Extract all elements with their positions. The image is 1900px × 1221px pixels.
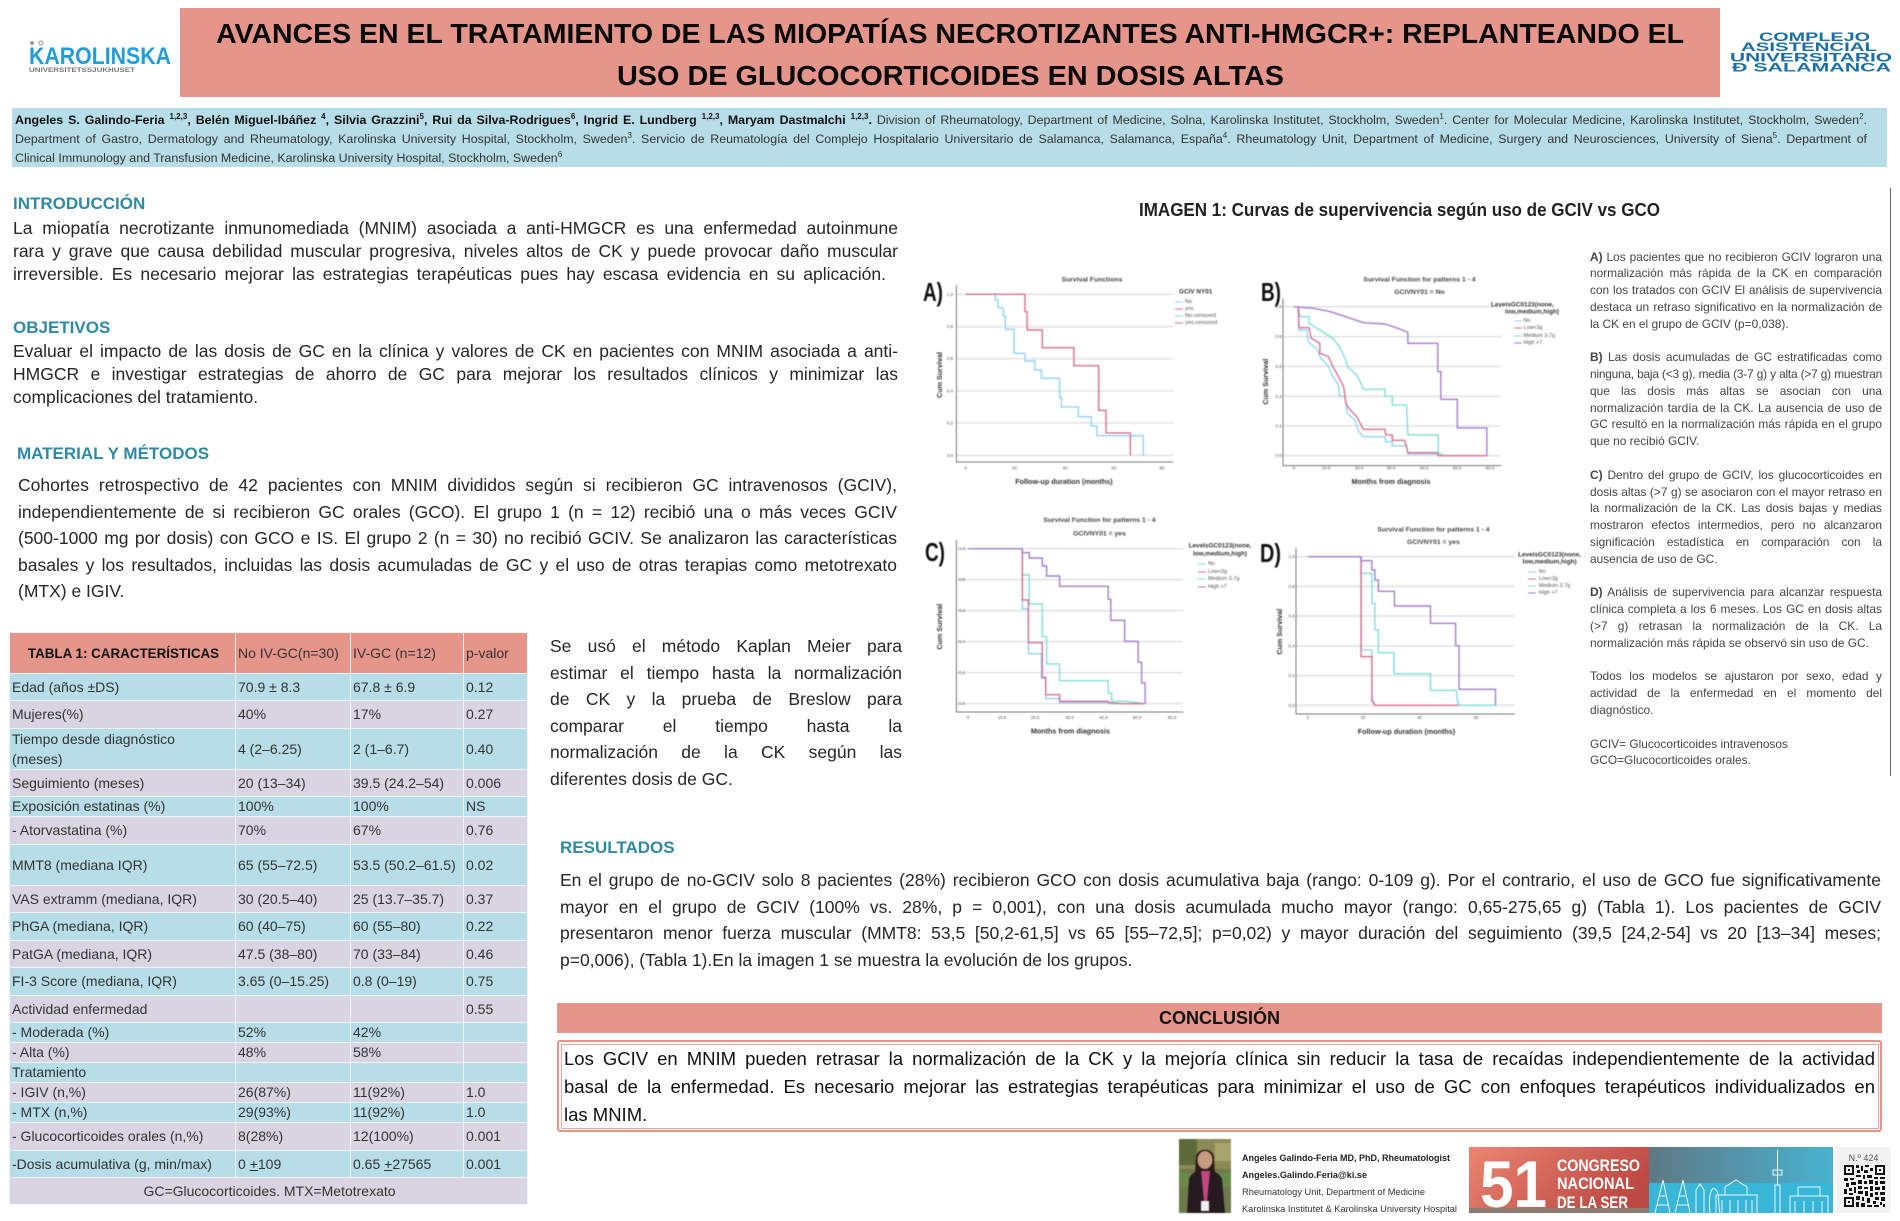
table 1: características: - Atorvastatina (%) bbox=[12, 822, 127, 838]
text: figure explanation A-D bbox=[1590, 250, 1882, 767]
chart C: GCIV dose patterns, months from diagnosis: 10.0 bbox=[998, 715, 1007, 720]
chart B: no GCIV dose patterns: 40.0 bbox=[1420, 466, 1429, 470]
title banner: USO DE GLUCOCORTICOIDES EN DOSIS ALTAS bbox=[617, 60, 1284, 91]
text: introducción: La miopatía necrotizante inmunomediada (MNIM) asociada a anti-HMGCR es una enfermedad autoinmune bbox=[13, 218, 898, 238]
chart D: GCIV dose patterns, follow-up duration: High >7 bbox=[1539, 590, 1558, 596]
heading bar: conclusión bbox=[557, 1003, 1882, 1033]
table 1: características: 70% bbox=[238, 822, 266, 838]
table 1: características: - Moderada (%) bbox=[12, 1024, 109, 1040]
table 1: características: 12(100%) bbox=[353, 1128, 414, 1144]
chart A: survival functions: A) bbox=[923, 277, 943, 307]
chart B: no GCIV dose patterns: 60.0 bbox=[1486, 466, 1495, 470]
chart D: GCIV dose patterns, follow-up duration: low,medium,high) bbox=[1523, 558, 1577, 566]
chart B: no GCIV dose patterns: B) bbox=[1261, 277, 1281, 307]
table 1: características: Tiempo desde diagnóstico bbox=[12, 731, 175, 747]
chart A: survival functions: 80 bbox=[1159, 466, 1165, 470]
logo: Complejo Asistencial Universitario de Salamanca: ASISTENCIAL bbox=[1741, 42, 1877, 54]
chart C: GCIV dose patterns, months from diagnosis: 0.8 bbox=[959, 577, 966, 582]
chart C: GCIV dose patterns, months from diagnosis: 60.0 bbox=[1168, 715, 1177, 720]
chart C: GCIV dose patterns, months from diagnosis: 30.0 bbox=[1065, 715, 1074, 720]
table 1: características: TABLA 1: CARACTERÍSTICAS bbox=[28, 646, 219, 660]
chart A: survival functions: yes bbox=[1185, 306, 1194, 312]
table 1: características: 0.8 (0–19) bbox=[353, 973, 417, 989]
photo: author portrait bbox=[1178, 1138, 1232, 1214]
heading bar: conclusión: CONCLUSIÓN bbox=[1159, 1008, 1280, 1028]
table 1: características: -Dosis acumulativa (g, min/max) bbox=[12, 1156, 212, 1172]
chart A: survival functions: 20 bbox=[1012, 466, 1017, 470]
table 1: características: 8(28%) bbox=[238, 1128, 283, 1144]
chart B: no GCIV dose patterns: 20.0 bbox=[1355, 466, 1364, 470]
table 1: características: 52% bbox=[238, 1024, 266, 1040]
chart D: GCIV dose patterns, follow-up duration: Cum Survival bbox=[1275, 609, 1284, 655]
chart A: survival functions: No-censored bbox=[1185, 313, 1216, 319]
chart B: no GCIV dose patterns: 0.2 bbox=[1275, 424, 1282, 428]
chart B: no GCIV dose patterns: GCIVNY01 = No bbox=[1394, 289, 1445, 296]
table 1: características: 0.65 +27565 bbox=[353, 1156, 431, 1172]
authors and affiliations band: Angeles S. Galindo-Feria 1,2,3, Belén Miguel-Ibáñez 4, Silvia Grazzini5, Rui da Silva-Rodrigues6, Ingrid E. Lundberg 1,2,3, Maryam Dastmalchi 1,2,3. Division of Rheumatology, Department of Medicine, Solna, Karolinska Institutet, Stockholm, Sweden1. Center for Molecular Medicine, Karolinska Institutet, Stockholm, Sweden2. bbox=[15, 112, 1867, 127]
chart C: GCIV dose patterns, months from diagnosis: 0.0 bbox=[959, 701, 966, 706]
text: figure explanation A-D: significación estadística en comparación con la bbox=[1590, 535, 1882, 549]
table 1: características: - IGIV (n,%) bbox=[12, 1084, 86, 1100]
text: resultados: mayor en el grupo de GCIV (100% vs. 28%, p = 0,001), con una dosis acumulada mucho mayor (rango: 0,65-275,65 g) (Tabla 1). Los pacientes de GCIV bbox=[560, 896, 1881, 916]
author contact details: Angeles Galindo-Feria MD, PhD, Rheumatologist bbox=[1242, 1153, 1451, 1164]
table 1: características: VAS extramm (mediana, IQR) bbox=[12, 890, 197, 906]
table 1: características: Mujeres(%) bbox=[12, 706, 84, 722]
text: figure explanation A-D: normalización más rápida de la CK en comparación bbox=[1590, 266, 1882, 280]
text: material y métodos: basales y los resultados, incluidas las dosis acumuladas de GC y el uso de otras terapias como metotrexato bbox=[18, 555, 897, 575]
table 1: características bbox=[9, 632, 528, 1205]
author contact details bbox=[1242, 1153, 1457, 1215]
text: figure explanation A-D: normalización más rápida se observó sin uso de GC. bbox=[1590, 636, 1869, 650]
table 1: características: 48% bbox=[238, 1044, 266, 1060]
chart B: no GCIV dose patterns: 1.0 bbox=[1275, 304, 1282, 309]
text: introducción bbox=[13, 218, 898, 284]
text: método estadístico: normalización de la CK según las bbox=[550, 742, 902, 762]
table 1: características: (meses) bbox=[12, 751, 63, 767]
banner: 51 Congreso Nacional de la SER: CONGRESO bbox=[1557, 1156, 1640, 1175]
table 1: características: 42% bbox=[353, 1024, 381, 1040]
table 1: características: 67% bbox=[353, 822, 381, 838]
chart B: no GCIV dose patterns: Medium 3-7g bbox=[1524, 333, 1555, 339]
chart A: survival functions: No bbox=[1185, 299, 1192, 305]
table 1: características: Tratamiento bbox=[12, 1064, 86, 1080]
author contact details: Rheumatology Unit, Department of Medicine bbox=[1242, 1187, 1425, 1198]
text: objetivos: complicaciones del tratamiento. bbox=[13, 386, 258, 406]
chart A: survival functions: 60 bbox=[1111, 466, 1117, 470]
banner: 51 Congreso Nacional de la SER: DE LA SER bbox=[1557, 1193, 1628, 1212]
panel: conclusión text box: Los GCIV en MNIM pueden retrasar la normalización de la CK y la mejoría clínica sin reducir la tasa de recaídas independientemente de la actividad bbox=[564, 1048, 1875, 1069]
chart B: no GCIV dose patterns: 0.6 bbox=[1275, 364, 1282, 369]
logo: Complejo Asistencial Universitario de Salamanca: UNIVERSITARIO bbox=[1730, 52, 1892, 64]
table 1: características: MMT8 (mediana IQR) bbox=[12, 856, 147, 872]
chart B: no GCIV dose patterns: Low<3g bbox=[1524, 325, 1543, 331]
chart B: no GCIV dose patterns: 30.0 bbox=[1387, 466, 1396, 470]
chart C: GCIV dose patterns, months from diagnosis: No bbox=[1208, 561, 1215, 567]
text: introducción: rara y grave que causa debilidad muscular progresiva, niveles altos de CK y puede provocar daño muscular bbox=[13, 240, 898, 260]
chart D: GCIV dose patterns, follow-up duration: 0 bbox=[1306, 715, 1309, 720]
chart D: GCIV dose patterns, follow-up duration: Medium 3-7g bbox=[1539, 583, 1570, 589]
chart C: GCIV dose patterns, months from diagnosis: 1.0 bbox=[959, 546, 966, 551]
QR code and poster number bbox=[1836, 1147, 1891, 1213]
text: método estadístico bbox=[550, 636, 902, 789]
chart A: survival functions: 0.6 bbox=[947, 356, 954, 361]
chart D: GCIV dose patterns, follow-up duration: 0.8 bbox=[1288, 584, 1295, 589]
table 1: características: GC=Glucocorticoides. MTX=Metotrexato bbox=[143, 1182, 396, 1198]
table 1: características: 11(92%) bbox=[353, 1104, 405, 1120]
chart A: survival functions: 40 bbox=[1062, 466, 1068, 470]
chart D: GCIV dose patterns, follow-up duration: 40 bbox=[1417, 715, 1422, 720]
chart A: survival functions: 1.0 bbox=[947, 292, 954, 297]
text: resultados: p=0,006), (Tabla 1).En la imagen 1 se muestra la evolución de los grupos. bbox=[560, 950, 1132, 970]
chart A: survival functions: Cum Survival bbox=[935, 352, 944, 398]
chart D: GCIV dose patterns, follow-up duration: Follow-up duration (months) bbox=[1358, 727, 1456, 736]
panel: conclusión text box: basal de la enfermedad. Es necesario mejorar las estrategias terapéuticas para minimizar el uso de GC con enfoques terapéuticos individualizados en bbox=[564, 1076, 1875, 1097]
table 1: características: 0.46 bbox=[466, 946, 493, 962]
table 1: características: 3.65 (0–15.25) bbox=[238, 973, 329, 989]
table 1: características: 53.5 (50.2–61.5) bbox=[353, 856, 456, 872]
chart D: GCIV dose patterns, follow-up duration: 0.4 bbox=[1288, 644, 1295, 648]
table 1: características: 17% bbox=[353, 706, 381, 722]
panel: conclusión text box: las MNIM. bbox=[564, 1104, 647, 1125]
table 1: características: 65 (55–72.5) bbox=[238, 856, 317, 872]
chart A: survival functions: 0.4 bbox=[947, 388, 954, 394]
chart C: GCIV dose patterns, months from diagnosis: GCIVNY01 = yes bbox=[1073, 530, 1126, 538]
chart C: GCIV dose patterns, months from diagnosis: 0.4 bbox=[959, 639, 966, 644]
table 1: características: 0.76 bbox=[466, 822, 493, 838]
text: método estadístico: Se usó el método Kaplan Meier para bbox=[550, 636, 902, 656]
table 1: características: 30 (20.5–40) bbox=[238, 890, 317, 906]
text: figure explanation A-D: Todos los modelos se ajustaron por sexo, edad y bbox=[1590, 669, 1882, 683]
heading: material y métodos: MATERIAL Y MÉTODOS bbox=[17, 444, 209, 463]
heading: objetivos: OBJETIVOS bbox=[13, 318, 110, 337]
table 1: características: FI-3 Score (mediana, IQR) bbox=[12, 973, 177, 989]
chart D: GCIV dose patterns, follow-up duration: 0.0 bbox=[1288, 703, 1295, 708]
table 1: características: 0.22 bbox=[466, 918, 493, 934]
chart A: survival functions: Survival Functions bbox=[1062, 276, 1123, 284]
table 1: características: 39.5 (24.2–54) bbox=[353, 774, 444, 790]
table 1: características: - Glucocorticoides orales (n,%) bbox=[12, 1128, 203, 1144]
vertical rule beside figure notes bbox=[1890, 188, 1891, 776]
chart A: survival functions: yes-censored bbox=[1185, 320, 1217, 326]
text: resultados bbox=[560, 870, 1881, 970]
chart B: no GCIV dose patterns bbox=[1261, 276, 1559, 486]
chart D: GCIV dose patterns, follow-up duration: 60 bbox=[1473, 715, 1479, 720]
chart C: GCIV dose patterns, months from diagnosis: low,medium,high) bbox=[1193, 550, 1247, 558]
chart A: survival functions: Follow-up duration (months) bbox=[1015, 477, 1113, 486]
table 1: características: PatGA (mediana, IQR) bbox=[12, 946, 152, 962]
text: resultados: En el grupo de no-GCIV solo 8 pacientes (28%) recibieron GCO con dosis acumulativa baja (rango: 0-109 g). Por el contrario, el uso de GCO fue significativamente bbox=[560, 870, 1881, 890]
table 1: características: 0.001 bbox=[466, 1156, 501, 1172]
chart C: GCIV dose patterns, months from diagnosis: Medium 3-7g bbox=[1208, 576, 1239, 582]
chart B: no GCIV dose patterns: 0.4 bbox=[1275, 394, 1282, 399]
author contact details: Karolinska Institutet & Karolinska University Hospital bbox=[1242, 1204, 1457, 1215]
table 1: características: 1.0 bbox=[466, 1084, 485, 1100]
chart B: no GCIV dose patterns: High >7 bbox=[1524, 340, 1542, 346]
chart B: no GCIV dose patterns: 0.0 bbox=[1275, 453, 1282, 458]
chart C: GCIV dose patterns, months from diagnosis: Low<3g bbox=[1208, 569, 1227, 575]
authors and affiliations band bbox=[12, 108, 1887, 167]
chart D: GCIV dose patterns, follow-up duration: 0.2 bbox=[1288, 673, 1295, 678]
table 1: características: IV-GC (n=12) bbox=[353, 644, 436, 660]
authors and affiliations band: Department of Gastro, Dermatology and Rheumatology, Karolinska University Hospital, Stockholm, Sweden3. Servicio de Reumatología del Complejo Hospitalario Universitario de Salamanca, Salamanca, España4. Rheumatology Unit, Department of Medicine, Surgery and Neurosciences, University of Siena5. Department of bbox=[15, 131, 1867, 146]
chart C: GCIV dose patterns, months from diagnosis: LevelsGC0123(none, bbox=[1189, 542, 1252, 550]
text: figure explanation A-D: mostraron efectos intermedios, pero no alcanzaron bbox=[1590, 518, 1882, 532]
table 1: características: 0.37 bbox=[466, 890, 493, 906]
table 1: características: 20 (13–34) bbox=[238, 774, 306, 790]
banner: 51 Congreso Nacional de la SER: NACIONAL bbox=[1557, 1174, 1634, 1193]
chart C: GCIV dose patterns, months from diagnosis bbox=[925, 517, 1252, 736]
chart D: GCIV dose patterns, follow-up duration: Low<3g bbox=[1539, 576, 1558, 582]
table 1: características: 100% bbox=[353, 798, 389, 814]
table 1: características: 29(93%) bbox=[238, 1104, 291, 1120]
chart A: survival functions: 0.0 bbox=[947, 453, 954, 458]
panel: conclusión text box bbox=[557, 1040, 1882, 1132]
table 1: características: 0.006 bbox=[466, 774, 501, 790]
text: figure explanation A-D: B) Las dosis acumuladas de GC estratificadas como bbox=[1590, 350, 1882, 364]
text: método estadístico: estimar el tiempo hasta la normalización bbox=[550, 663, 902, 683]
text: figure explanation A-D: clínica completa a los 6 meses. Los GC en dosis altas bbox=[1590, 602, 1882, 616]
table 1: características: 70 (33–84) bbox=[353, 946, 421, 962]
chart A: survival functions: GCIV NY01 bbox=[1179, 288, 1213, 296]
table 1: características: 25 (13.7–35.7) bbox=[353, 890, 444, 906]
table 1: características: 1.0 bbox=[466, 1104, 485, 1120]
text: figure explanation A-D: GCO=Glucocorticoides orales. bbox=[1590, 753, 1751, 767]
heading: introducción: INTRODUCCIÓN bbox=[13, 194, 145, 213]
chart D: GCIV dose patterns, follow-up duration: Survival Function for patterns 1 - 4 bbox=[1377, 526, 1490, 534]
table 1: características: p-valor bbox=[466, 644, 509, 660]
table 1: características: 4 (2–6.25) bbox=[238, 740, 302, 756]
QR code and poster number: N.º 424 bbox=[1849, 1153, 1878, 1163]
logo: Complejo Asistencial Universitario de Salamanca bbox=[1730, 32, 1892, 74]
text: figure explanation A-D: que las dosis más altas se asocian con una bbox=[1590, 384, 1882, 398]
chart B: no GCIV dose patterns: 0 bbox=[1293, 466, 1296, 470]
chart C: GCIV dose patterns, months from diagnosis: High >7 bbox=[1208, 584, 1227, 590]
table 1: características: 26(87%) bbox=[238, 1084, 291, 1100]
text: material y métodos bbox=[18, 475, 897, 601]
table 1: características: 0.12 bbox=[466, 678, 493, 694]
text: figure explanation A-D: que no recibió GCIV. bbox=[1590, 434, 1699, 448]
text: figure explanation A-D: diagnóstico. bbox=[1590, 703, 1653, 717]
table 1: características: - Alta (%) bbox=[12, 1044, 70, 1060]
table 1: características: Exposición estatinas (%) bbox=[12, 798, 165, 814]
authors and affiliations band: Clinical Immunology and Transfusion Medicine, Karolinska University Hospital, Stockholm, Sweden6 bbox=[15, 150, 562, 165]
text: introducción: irreversible. Es necesario mejorar las estrategias terapéuticas pues hay escasa evidencia en su aplicación. bbox=[13, 264, 886, 284]
table 1: características: 40% bbox=[238, 706, 266, 722]
table 1: características: No IV-GC(n=30) bbox=[238, 644, 339, 660]
chart D: GCIV dose patterns, follow-up duration: LevelsGC0123(none, bbox=[1518, 552, 1581, 558]
table 1: características: Actividad enfermedad bbox=[12, 1000, 147, 1016]
text: método estadístico: comparar el tiempo hasta la bbox=[550, 716, 902, 736]
table 1: características: - MTX (n,%) bbox=[12, 1104, 87, 1120]
chart B: no GCIV dose patterns: Survival Function for patterns 1 - 4 bbox=[1363, 276, 1476, 284]
author contact details: Angeles.Galindo.Feria@ki.se bbox=[1242, 1170, 1367, 1181]
text: figure explanation A-D: (>7 g) retrasan la normalización de la CK. La bbox=[1590, 619, 1882, 633]
table 1: características: 0.40 bbox=[466, 740, 493, 756]
chart C: GCIV dose patterns, months from diagnosis: 20.0 bbox=[1031, 715, 1040, 720]
text: resultados: presentaron menor fuerza muscular (MMT8: 53,5 [50,2-61,5] vs 65 [55–72,5]; p=0,02) y mayor duración del seguimiento (39,5 [24,2-54] vs 20 [13–34] meses; bbox=[560, 923, 1881, 943]
chart B: no GCIV dose patterns: low,medium,high) bbox=[1505, 308, 1559, 316]
text: figure explanation A-D: GCIV= Glucocorticoides intravenosos bbox=[1590, 737, 1788, 751]
table 1: características: Edad (años ±DS) bbox=[12, 678, 119, 694]
chart C: GCIV dose patterns, months from diagnosis: 40.0 bbox=[1099, 715, 1108, 720]
chart C: GCIV dose patterns, months from diagnosis: Cum Survival bbox=[935, 604, 944, 650]
text: figure explanation A-D: actividad de la enfermedad en el momento del bbox=[1590, 686, 1882, 700]
chart B: no GCIV dose patterns: Months from diagnosis bbox=[1351, 477, 1431, 486]
table 1: características: 60 (40–75) bbox=[238, 918, 306, 934]
text: figure explanation A-D: la normalización de la CK. Las dosis bajas y medias bbox=[1590, 501, 1882, 515]
chart B: no GCIV dose patterns: LevelsGC0123(none, bbox=[1491, 302, 1554, 308]
title banner: AVANCES EN EL TRATAMIENTO DE LAS MIOPATÍAS NECROTIZANTES ANTI-HMGCR+: REPLANTEANDO EL bbox=[216, 18, 1684, 49]
text: material y métodos: (MTX) e IGIV. bbox=[18, 581, 124, 601]
chart B: no GCIV dose patterns: 10.0 bbox=[1322, 466, 1331, 470]
logo: Karolinska: UNIVERSITETSSJUKHUSET bbox=[29, 67, 135, 74]
table 1: características: 0.75 bbox=[466, 973, 493, 989]
chart D: GCIV dose patterns, follow-up duration bbox=[1260, 526, 1581, 736]
logo: Complejo Asistencial Universitario de Salamanca: COMPLEJO bbox=[1759, 32, 1870, 44]
text: figure explanation A-D: dosis altas (>7 g) se asociaron con el mayor retraso en bbox=[1590, 485, 1882, 499]
text: figure explanation A-D: GC resultó en la normalización más rápida en el grupo bbox=[1590, 417, 1882, 431]
logo: Complejo Asistencial Universitario de Salamanca: Ð SALAMANCA bbox=[1732, 62, 1891, 74]
chart B: no GCIV dose patterns: 50.0 bbox=[1453, 466, 1462, 470]
table 1: características: 0.02 bbox=[466, 856, 493, 872]
table 1: características: 0.55 bbox=[466, 1000, 493, 1016]
text: objetivos bbox=[13, 340, 898, 406]
table 1: características: 11(92%) bbox=[353, 1084, 405, 1100]
chart D: GCIV dose patterns, follow-up duration: 20 bbox=[1360, 715, 1366, 720]
text: figure explanation A-D: D) Análisis de supervivencia para alcanzar respuesta bbox=[1590, 585, 1882, 599]
table 1: características: 70.9 ± 8.3 bbox=[238, 678, 300, 694]
table 1: características: 0.27 bbox=[466, 706, 493, 722]
figure: survival curves bbox=[922, 276, 1582, 736]
chart D: GCIV dose patterns, follow-up duration: D) bbox=[1260, 538, 1281, 568]
table 1: características: 67.8 ± 6.9 bbox=[353, 678, 415, 694]
text: método estadístico: diferentes dosis de GC. bbox=[550, 769, 733, 789]
chart C: GCIV dose patterns, months from diagnosis: 50.0 bbox=[1133, 715, 1142, 720]
table 1: características: 100% bbox=[238, 798, 274, 814]
text: figure explanation A-D: destaca un retraso significativo en la normalización de bbox=[1590, 300, 1882, 314]
table 1: características: 58% bbox=[353, 1044, 381, 1060]
text: figure explanation A-D: con los tratados con GCIV El análisis de supervivencia bbox=[1590, 283, 1882, 297]
table 1: características: 2 (1–6.7) bbox=[353, 740, 409, 756]
text: figure explanation A-D: ninguna, baja (<3 g), media (3-7 g) y alta (>7 g) muestran bbox=[1590, 367, 1882, 381]
chart A: survival functions: 0.2 bbox=[947, 420, 954, 426]
banner: 51 Congreso Nacional de la SER bbox=[1469, 1147, 1833, 1213]
text: figure explanation A-D: ausencia de uso de GC. bbox=[1590, 552, 1718, 566]
table 1: características: 60 (55–80) bbox=[353, 918, 421, 934]
chart A: survival functions bbox=[923, 276, 1217, 486]
chart D: GCIV dose patterns, follow-up duration: 1.0 bbox=[1288, 554, 1295, 559]
chart D: GCIV dose patterns, follow-up duration: No bbox=[1539, 569, 1546, 575]
text: figure explanation A-D: normalización tardía de la CK. La ausencia de uso de bbox=[1590, 401, 1882, 415]
text: método estadístico: de CK y la prueba de Breslow para bbox=[550, 689, 902, 709]
text: objetivos: Evaluar el impacto de las dosis de GC en la clínica y valores de CK en pacientes con MNIM asociada a anti- bbox=[13, 340, 898, 360]
chart C: GCIV dose patterns, months from diagnosis: C) bbox=[925, 537, 945, 567]
table 1: características: 0 +109 bbox=[238, 1156, 281, 1172]
chart C: GCIV dose patterns, months from diagnosis: 0.6 bbox=[959, 608, 966, 613]
chart C: GCIV dose patterns, months from diagnosis: 0.2 bbox=[959, 670, 966, 675]
title banner bbox=[180, 8, 1720, 97]
chart B: no GCIV dose patterns: 0.8 bbox=[1275, 334, 1282, 339]
table 1: características: NS bbox=[466, 798, 485, 814]
table 1: características: PhGA (mediana, IQR) bbox=[12, 918, 148, 934]
table 1: características: 47.5 (38–80) bbox=[238, 946, 317, 962]
chart D: GCIV dose patterns, follow-up duration: GCIVNY01 = yes bbox=[1407, 539, 1460, 546]
chart B: no GCIV dose patterns: Cum Survival bbox=[1261, 359, 1270, 405]
text: figure explanation A-D: la CK en el grupo de GCIV (p=0,038). bbox=[1590, 317, 1789, 331]
table 1: características: 0.001 bbox=[466, 1128, 501, 1144]
chart C: GCIV dose patterns, months from diagnosis: Survival Function for patterns 1 - 4 bbox=[1043, 517, 1156, 524]
text: material y métodos: independientemente de si recibieron GC orales (GCO). El grupo 1 (n = 12) recibió una o más veces GCIV bbox=[18, 502, 897, 522]
chart D: GCIV dose patterns, follow-up duration: 0.6 bbox=[1288, 614, 1295, 618]
text: figure explanation A-D: C) Dentro del grupo de GCIV, los glucocorticoides en bbox=[1590, 468, 1882, 482]
chart B: no GCIV dose patterns: No bbox=[1524, 318, 1531, 324]
text: figure explanation A-D: A) Los pacientes que no recibieron GCIV lograron una bbox=[1590, 250, 1882, 264]
chart A: survival functions: 0.8 bbox=[947, 324, 954, 329]
table 1: características: Seguimiento (meses) bbox=[12, 774, 144, 790]
chart C: GCIV dose patterns, months from diagnosis: Months from diagnosis bbox=[1031, 726, 1110, 736]
text: material y métodos: Cohortes retrospectivo de 42 pacientes con MNIM divididos según si recibieron GC intravenosos (GCIV), bbox=[18, 475, 897, 495]
text: objetivos: HMGCR e investigar estrategias de ahorro de GC para mejorar los resultados clínicos y minimizar las bbox=[13, 364, 898, 384]
chart C: GCIV dose patterns, months from diagnosis: 0 bbox=[967, 715, 970, 720]
heading: resultados: RESULTADOS bbox=[560, 838, 675, 857]
text: material y métodos: (500-1000 mg por dosis) con GCO e IS. El grupo 2 (n = 30) no recibió GCIV. Se analizaron las características bbox=[18, 528, 897, 548]
chart A: survival functions: 0 bbox=[964, 466, 967, 470]
